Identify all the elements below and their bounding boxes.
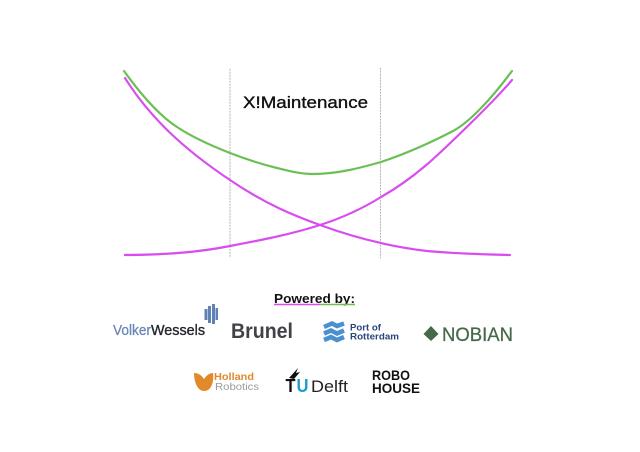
logo: Brunel: Brunel — [231, 319, 293, 343]
heading: powered by: Powered by: — [274, 291, 355, 306]
logo: RoboHouse: ROBO — [372, 367, 410, 383]
logo: RoboHouse: HOUSE — [372, 380, 420, 396]
logo: TU Delft — [286, 368, 348, 396]
title: X!Maintenance — [243, 94, 368, 112]
logo: VolkerWessels: Wessels — [151, 323, 205, 339]
logo: Nobian: NOBIAN — [442, 324, 513, 346]
chart: maintenance cost curves — [124, 68, 512, 258]
logo: Holland Robotics: Holland — [214, 371, 254, 383]
logo: Holland Robotics: Robotics — [215, 381, 259, 393]
logo: VolkerWessels: Volker — [113, 323, 151, 339]
logo: TU Delft: Delft — [311, 378, 348, 396]
logo: RoboHouse — [372, 367, 420, 396]
logo: Holland Robotics — [194, 371, 259, 393]
logo: Port of Rotterdam: Rotterdam — [350, 332, 399, 342]
logo: TU Delft: T — [286, 376, 296, 396]
logo: Port of Rotterdam — [324, 322, 399, 342]
logo: VolkerWessels — [113, 304, 218, 339]
logo: Port of Rotterdam: Port of — [350, 322, 382, 332]
logo: TU Delft: U — [296, 376, 308, 396]
